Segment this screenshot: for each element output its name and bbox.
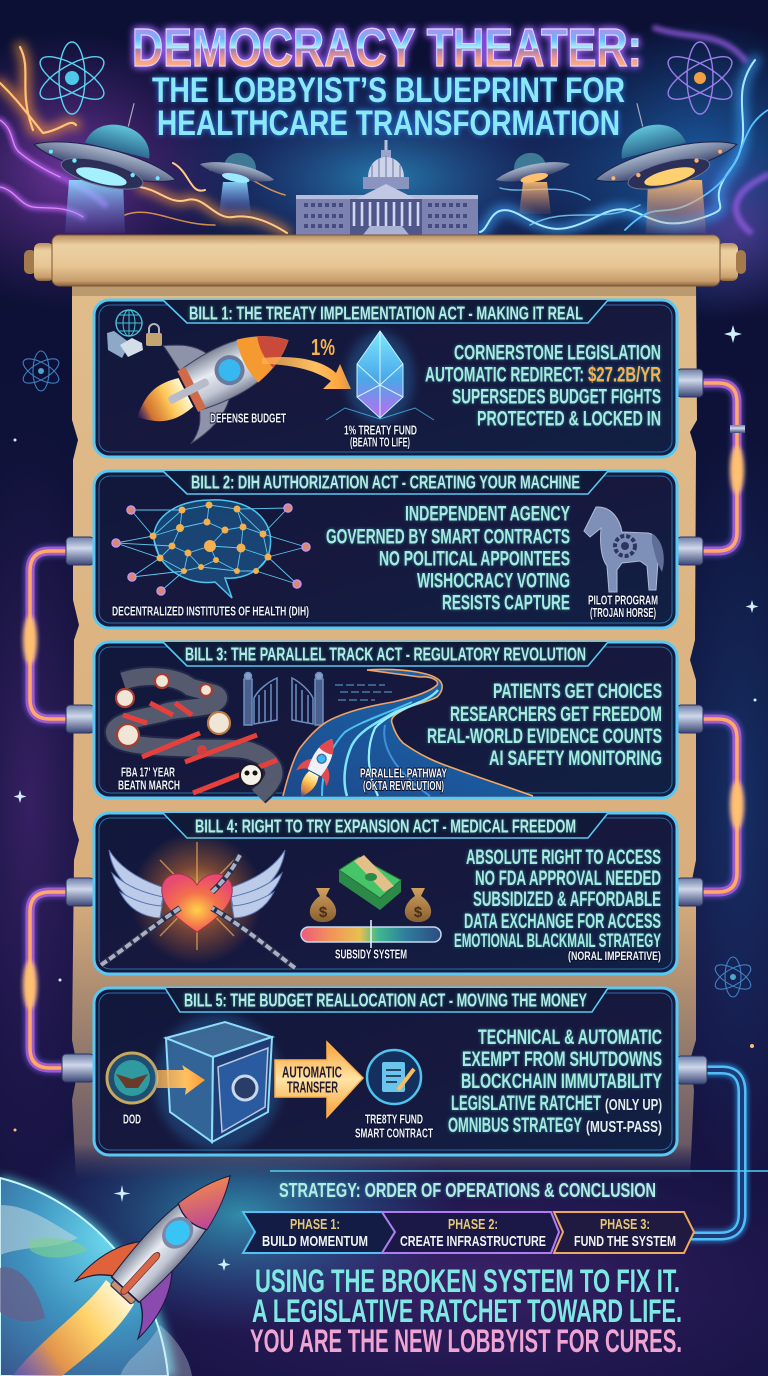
bill 2 key points: WISHOCRACY VOTING [417,570,570,592]
panel: bill 4 [94,813,677,974]
icon: large rocket [75,1147,261,1339]
smart contract label [355,1112,433,1140]
arrow: one percent redirect [262,357,351,389]
pipe: bill 3 to bill 4 [677,705,744,906]
parallel pathway label [360,766,447,793]
smart contract label: SMART CONTRACT [355,1126,433,1140]
capitol building [296,140,478,236]
icon: dod seal [107,1053,157,1103]
ufo small left [198,145,278,214]
bill 3 key points: RESEARCHERS GET FREEDOM [450,703,662,726]
treaty fund label [344,422,417,450]
title: THE LOBBYIST’S BLUEPRINT FOR [152,71,625,110]
icon: winged heart with broken chains [101,832,295,968]
bill 2 key points: GOVERNED BY SMART CONTRACTS [326,526,570,548]
energy lightning right [480,28,768,232]
bill 1 key points: SUPERSEDES BUDGET FIGHTS [452,386,661,408]
phase 3 chevron: PHASE 3: [600,1216,650,1233]
ufo small right [492,145,572,214]
subsidy gauge [301,918,441,950]
ufo large left [28,82,191,233]
bill 1 key points: CORNERSTONE LEGISLATION [454,342,661,364]
phase 3 chevron [554,1212,694,1253]
bill 3 heading [163,642,608,666]
panel: bill 5 [94,988,677,1155]
bill 5 key points: (ONLY UP) [605,1097,662,1114]
bill 4 heading [163,813,608,838]
bill 5 key points: EXEMPT FROM SHUTDOWNS [462,1048,662,1071]
bill 3 key points: REAL-WORLD EVIDENCE COUNTS [427,725,662,748]
bill 5 key points: OMNIBUS STRATEGY [448,1114,582,1137]
phase 2 chevron [382,1212,559,1253]
subsidy label: SUBSIDY SYSTEM [335,946,407,962]
phase 1 chevron: BUILD MOMENTUM [262,1233,368,1250]
panel: bill 2 [94,471,677,628]
energy lightning left [0,47,287,233]
title: DEMOCRACY THEATER: [132,18,642,78]
smart contract label: TRE8TY FUND [365,1112,423,1126]
fda death march label: BEATN MARCH [118,778,180,792]
fda death march label [118,764,180,792]
earth [0,1176,192,1376]
dod label: DOD [123,1112,141,1126]
phase 1 chevron: PHASE 1: [290,1216,340,1233]
trojan horse label: (TROJAN HORSE) [590,605,656,620]
bill 4 key points [454,846,661,963]
bill 3 key points: AI SAFETY MONITORING [489,747,662,770]
icon: money bag left [310,888,336,922]
ufo large right [580,82,743,233]
bill 3 heading: BILL 3: THE PARALLEL TRACK ACT - REGULATORY REVOLUTION [185,644,586,664]
arrow: automatic transfer [275,1042,363,1117]
conclusion text [250,1263,682,1359]
trojan horse label: PILOT PROGRAM [588,592,658,608]
defense budget label: DEFENSE BUDGET [210,410,286,426]
bill 1 key points: AUTOMATIC REDIRECT: [425,364,584,386]
pipe: bill 5 to strategy [677,1056,742,1236]
bill 3 key points [427,680,662,770]
bill 2 key points [326,502,570,614]
arrow: into vault [157,1065,205,1095]
icon: money bag right: $ [414,904,423,921]
parallel pathway label: PARALLEL PATHWAY [360,766,447,780]
bill 1 key points: $27.2B/YR [588,364,661,386]
bill 1 heading [163,300,608,324]
icon: trojan horse [584,507,664,592]
one percent label: 1% [311,334,335,360]
icon: stack of cash [339,855,401,910]
bill 1 key points: PROTECTED & LOCKED IN [477,408,661,430]
arrow: automatic transfer: TRANSFER [287,1080,338,1096]
icon: globe handshake lock [107,310,162,358]
bill 5 key points: (MUST-PASS) [586,1119,662,1136]
phase 3 chevron: FUND THE SYSTEM [574,1233,676,1250]
bill 5 heading: BILL 5: THE BUDGET REALLOCATION ACT - MOVING THE MONEY [184,990,587,1010]
bill 4 key points: NO FDA APPROVAL NEEDED [475,867,661,890]
icon: atom side right [712,957,754,997]
phase 2 chevron: CREATE INFRASTRUCTURE [400,1233,546,1250]
icon: money bag right [405,888,431,922]
bill 5 key points: LEGISLATIVE RATCHET [451,1092,601,1115]
panel: bill 1 [94,294,677,460]
bill 5 key points: TECHNICAL & AUTOMATIC [478,1026,662,1049]
icon: decentralized brain network [112,500,310,598]
bill 1 heading: BILL 1: THE TREATY IMPLEMENTATION ACT - MAKING IT REAL [189,304,583,324]
glowing divider [282,668,286,795]
title [132,18,642,143]
phase 2 chevron: PHASE 2: [448,1216,498,1233]
pipe: bill 4 to bill 5 [23,878,94,1082]
rocket exhaust flame [12,1280,134,1376]
treaty fund label: (BEATN TO LIFE) [350,434,410,450]
trojan horse label [588,592,658,620]
bill 4 key points: (NORAL IMPERATIVE) [568,951,661,963]
bill 2 heading: BILL 2: DIH AUTHORIZATION ACT - CREATING YOUR MACHINE [191,472,580,492]
fda death march road [114,674,277,796]
bill 5 heading [165,988,608,1012]
fda death march label: FBA 17' YEAR [121,764,175,780]
panel: bill 3 [94,642,677,806]
bill 1 key points [425,342,661,430]
bill 2 key points: INDEPENDENT AGENCY [405,502,570,526]
bill 2 key points: RESISTS CAPTURE [442,592,570,614]
icon: small rocket [286,731,347,806]
icon: money bag left: $ [319,904,328,921]
treaty fund label: 1% TREATY FUND [344,422,417,438]
bill 5 key points: BLOCKCHAIN IMMUTABILITY [461,1070,662,1093]
icon: atom side left [20,351,62,391]
horizon glow line [270,1170,768,1172]
parallel pathway road [283,670,533,796]
bill 4 heading: BILL 4: RIGHT TO TRY EXPANSION ACT - MEDICAL FREEDOM [195,816,576,836]
icon: treaty fund crystal [326,331,434,424]
pipe: bill 1 to bill 2 [677,369,745,565]
scroll top roller [24,235,746,286]
parallel pathway label: (OKTA REVRLUTION) [363,778,444,793]
bill 4 key points: SUBSIDIZED & AFFORDABLE [473,888,661,911]
gate closing [244,672,323,725]
bill 2 heading [163,471,608,494]
icon: atom left [34,42,110,114]
bill 2 key points: NO POLITICAL APPOINTEES [379,548,570,570]
icon: smart contract document [367,1050,421,1104]
brain label: DECENTRALIZED INSTITUTES OF HEALTH (DIH) [112,604,309,618]
title: HEALTHCARE TRANSFORMATION [157,104,620,143]
bill 5 key points [448,1026,662,1137]
scroll parchment body [72,282,697,1180]
icon: rocket defense budget [113,294,310,460]
icon: atom right [662,42,738,114]
arrow: automatic transfer: AUTOMATIC [282,1064,342,1082]
phase 1 chevron [243,1212,395,1253]
bill 3 key points: PATIENTS GET CHOICES [493,680,662,703]
icon: transparent vault [154,1014,282,1150]
sparkles [14,325,758,1271]
pipe: bill 2 to bill 3 [23,537,94,733]
